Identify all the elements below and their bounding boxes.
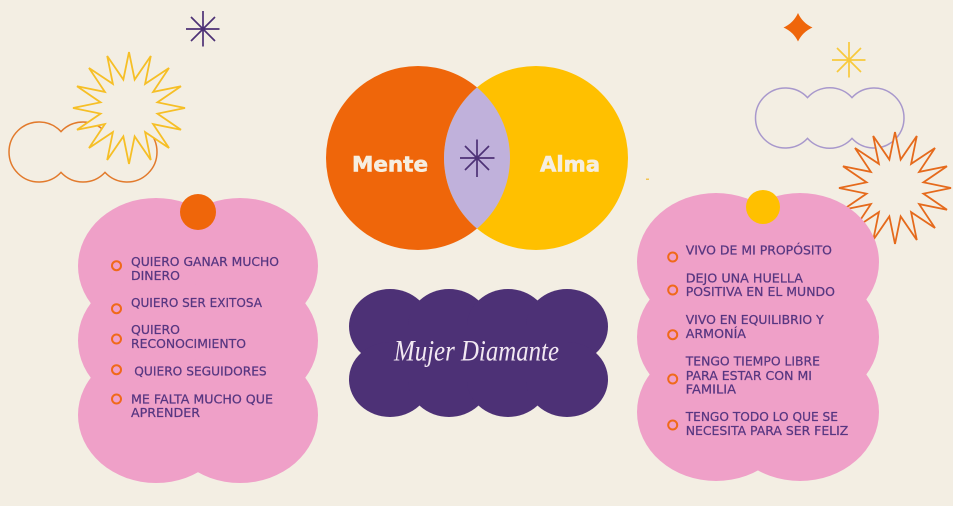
icon: lilac outline cloud (756, 88, 904, 148)
list item: aprender: ME FALTA MUCHO QUE (131, 392, 273, 408)
label: Mente: Mente (352, 152, 428, 176)
list item: propósito (668, 243, 832, 262)
list item: equilibrio y armonía (668, 313, 824, 342)
list item: aprender: APRENDER (131, 406, 200, 421)
list item: ser feliz (668, 410, 849, 439)
list item: huella positiva: DEJO UNA HUELLA (686, 272, 803, 287)
pink cloud shape (78, 198, 318, 483)
list item: seguidores: QUIERO SEGUIDORES (134, 364, 267, 380)
circle: Alma (444, 66, 628, 250)
list item: reconocimiento (112, 323, 246, 352)
list item: ganar dinero: QUIERO GANAR MUCHO (131, 255, 279, 270)
icon: yellow sunburst (73, 52, 185, 164)
list item: equilibrio y armonía: VIVO EN EQUILIBRIO Y (686, 313, 824, 328)
icon: dark purple asterisk (186, 11, 220, 46)
yellow circle badge (746, 190, 780, 224)
list item: aprender (112, 392, 273, 421)
icon: orange four-point star (784, 13, 812, 42)
icon: yellow asterisk (832, 42, 866, 78)
list item: tiempo libre: FAMILIA (686, 383, 736, 398)
list item: ganar dinero (112, 255, 279, 284)
list item: propósito: VIVO DE MI PROPÓSITO (686, 243, 832, 259)
list item: equilibrio y armonía: ARMONÍA (686, 326, 746, 342)
list item: reconocimiento: RECONOCIMIENTO (131, 337, 246, 352)
label: Alma: Alma (540, 152, 600, 176)
icon: asterisk in intersection (460, 140, 494, 177)
list item: ser feliz: NECESITA PARA SER FELIZ (686, 424, 849, 439)
list item: ser exitosa: QUIERO SER EXITOSA (131, 296, 262, 311)
panel: right pink list (637, 190, 879, 481)
list item: tiempo libre: PARA ESTAR CON MI (686, 369, 812, 384)
venn intersection (444, 87, 510, 229)
list item: ganar dinero: DINERO (131, 269, 180, 284)
panel: Mujer Diamante cloud (349, 289, 608, 417)
list item: reconocimiento: QUIERO (131, 323, 180, 338)
title: Mujer Diamante: Mujer Diamante (393, 334, 559, 368)
circle: Mente (326, 66, 510, 250)
list item: ser feliz: TENGO TODO LO QUE SE (685, 410, 838, 425)
pink cloud shape (637, 193, 879, 481)
list item: huella positiva (668, 272, 835, 300)
list item: huella positiva: POSITIVA EN EL MUNDO (686, 285, 835, 300)
orange circle badge (180, 194, 216, 230)
venn diagram: Mente and Alma (326, 66, 628, 250)
list item: tiempo libre: TENGO TIEMPO LIBRE (685, 355, 820, 370)
icon: small yellow speck (646, 178, 649, 180)
icon: orange outline cloud (9, 122, 157, 182)
purple cloud shape (349, 289, 608, 417)
icon: orange sunburst (839, 132, 951, 244)
panel: left pink list (78, 194, 318, 483)
list item: tiempo libre (668, 355, 820, 398)
